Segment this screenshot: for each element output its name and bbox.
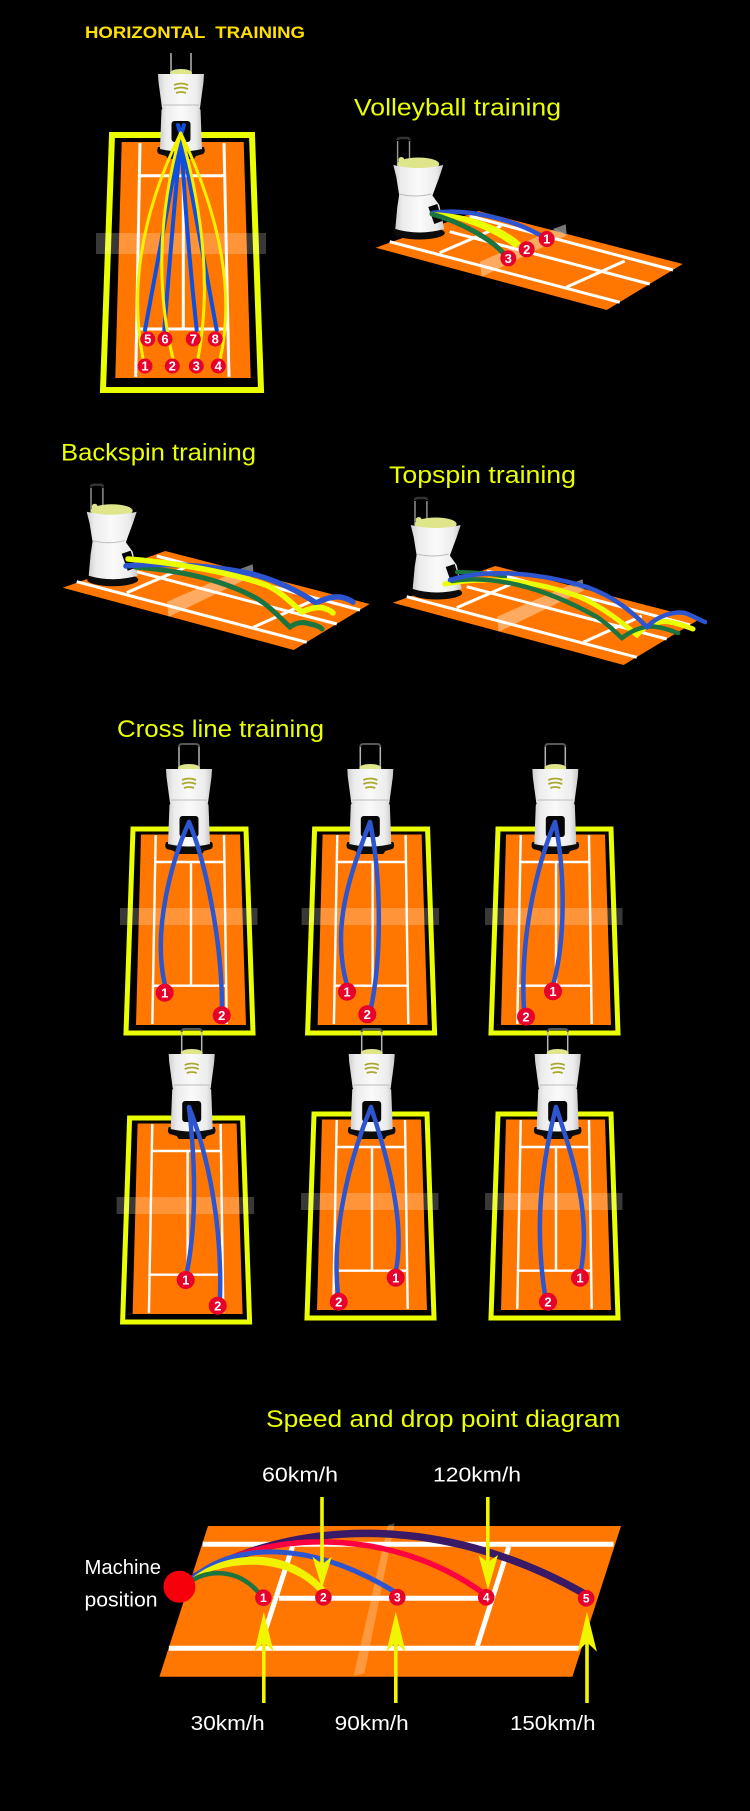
drop points: 2 (218, 1008, 225, 1023)
label: machine position: position (84, 1590, 158, 1612)
panel: topspin training (393, 498, 705, 665)
title: backspin training: Backspin training (61, 440, 256, 466)
drop points: 3 (505, 251, 512, 266)
panel: cross line court 2 (302, 744, 439, 1033)
court (485, 829, 622, 1033)
drop points (338, 983, 376, 1023)
label: 120km/h: 120km/h (433, 1464, 521, 1486)
drop points (156, 984, 231, 1024)
trajectories (540, 1107, 584, 1295)
court (117, 1118, 254, 1322)
drop points: 4 (215, 359, 223, 374)
drop points: 1 (543, 232, 550, 247)
machine (346, 744, 394, 854)
panel: speed diagram (84, 1464, 621, 1735)
machine (532, 744, 579, 854)
panel: cross line court 6 (485, 1029, 622, 1318)
machine (157, 49, 205, 159)
label: 60km/h: 60km/h (262, 1464, 338, 1486)
drop points: 2 (169, 359, 176, 374)
net band (96, 233, 266, 254)
machine position marker (163, 1571, 195, 1603)
orange court (115, 142, 251, 378)
drop points: 5 (144, 332, 151, 347)
court (302, 829, 439, 1033)
yellow trajectories (138, 133, 226, 360)
title: horizontal training: HORIZONTAL TRAINING (85, 23, 305, 42)
panel: cross line court 1 (120, 744, 258, 1033)
panel: cross line court 4 (117, 1029, 254, 1322)
drop points: 1 (549, 984, 557, 999)
drop points (177, 1271, 227, 1315)
panel: cross line court 5 (301, 1029, 438, 1318)
trajectories (193, 1533, 583, 1593)
perspective court (63, 551, 370, 650)
trajectories (445, 572, 705, 638)
court (120, 829, 258, 1033)
machine (165, 744, 213, 854)
perspective court (393, 566, 700, 665)
drop points: 1 (182, 1272, 189, 1288)
arrow: 150km/h (578, 1612, 597, 1703)
arrow: 90km/h (386, 1612, 406, 1703)
drop points: 1 (576, 1270, 584, 1286)
drop points: 8 (212, 332, 219, 347)
machine (393, 138, 445, 240)
drop points (517, 982, 562, 1026)
court (301, 1114, 438, 1318)
drop points: 6 (161, 332, 169, 347)
title: topspin training: Topspin training (389, 462, 576, 489)
label: machine position (84, 1557, 161, 1612)
court lines (135, 143, 229, 377)
blue trajectories (145, 125, 217, 330)
drop points: 1 (161, 986, 168, 1000)
arrow: 120km/h (479, 1497, 498, 1590)
trajectories (523, 822, 563, 1010)
panel: backspin training (63, 485, 370, 650)
label: 150km/h: 150km/h (510, 1713, 596, 1735)
handle fade mask (165, 46, 197, 53)
arrow: 60km/h (312, 1497, 332, 1588)
orange court (159, 1526, 621, 1677)
trajectories (161, 822, 222, 1008)
drop points (330, 1269, 405, 1311)
label: machine position: Machine (84, 1557, 161, 1579)
court frame (103, 135, 261, 390)
drop points: 5 (583, 1592, 590, 1606)
label: 90km/h: 90km/h (335, 1713, 409, 1735)
drop points: 1 (343, 984, 351, 1000)
drop points: 3 (394, 1591, 401, 1605)
machine (348, 1029, 396, 1139)
title: volleyball training: Volleyball training (354, 94, 561, 122)
drop points: 2 (522, 1010, 530, 1024)
drop points: 4 (483, 1591, 490, 1605)
machine (534, 1029, 582, 1139)
drop points (500, 231, 555, 266)
net (354, 1523, 395, 1676)
label: 30km/h: 30km/h (191, 1713, 265, 1735)
panel: horizontal training court (96, 46, 266, 390)
drop points (539, 1269, 589, 1311)
trajectories (341, 822, 379, 1008)
drop points: 2 (364, 1007, 371, 1022)
drop points: 1 (392, 1270, 399, 1286)
drop points: 1 (141, 359, 149, 374)
machine (168, 1029, 216, 1139)
machine (411, 498, 462, 600)
drop points: 1 (260, 1591, 267, 1605)
trajectories (126, 559, 353, 629)
drop points: 2 (214, 1298, 221, 1314)
perspective court (376, 211, 683, 310)
court lines (169, 1544, 614, 1648)
drop points: 2 (335, 1294, 342, 1310)
drop points: 2 (544, 1294, 552, 1310)
panel: volleyball training (376, 138, 683, 310)
arrow: 30km/h (254, 1612, 274, 1703)
drop points: 7 (190, 332, 197, 347)
drop points: 2 (523, 242, 530, 257)
drop points: 3 (193, 359, 200, 374)
court (485, 1114, 622, 1318)
drop points (138, 332, 226, 374)
drop points: 2 (320, 1591, 327, 1605)
panel: cross line court 3 (485, 744, 622, 1033)
trajectories (187, 1107, 220, 1297)
trajectories (431, 212, 540, 253)
machine (87, 485, 138, 586)
trajectories (337, 1107, 399, 1295)
drop points (255, 1589, 595, 1607)
title: cross line training: Cross line training (117, 716, 324, 743)
title: speed and drop point diagram: Speed and drop point diagram (266, 1406, 620, 1433)
